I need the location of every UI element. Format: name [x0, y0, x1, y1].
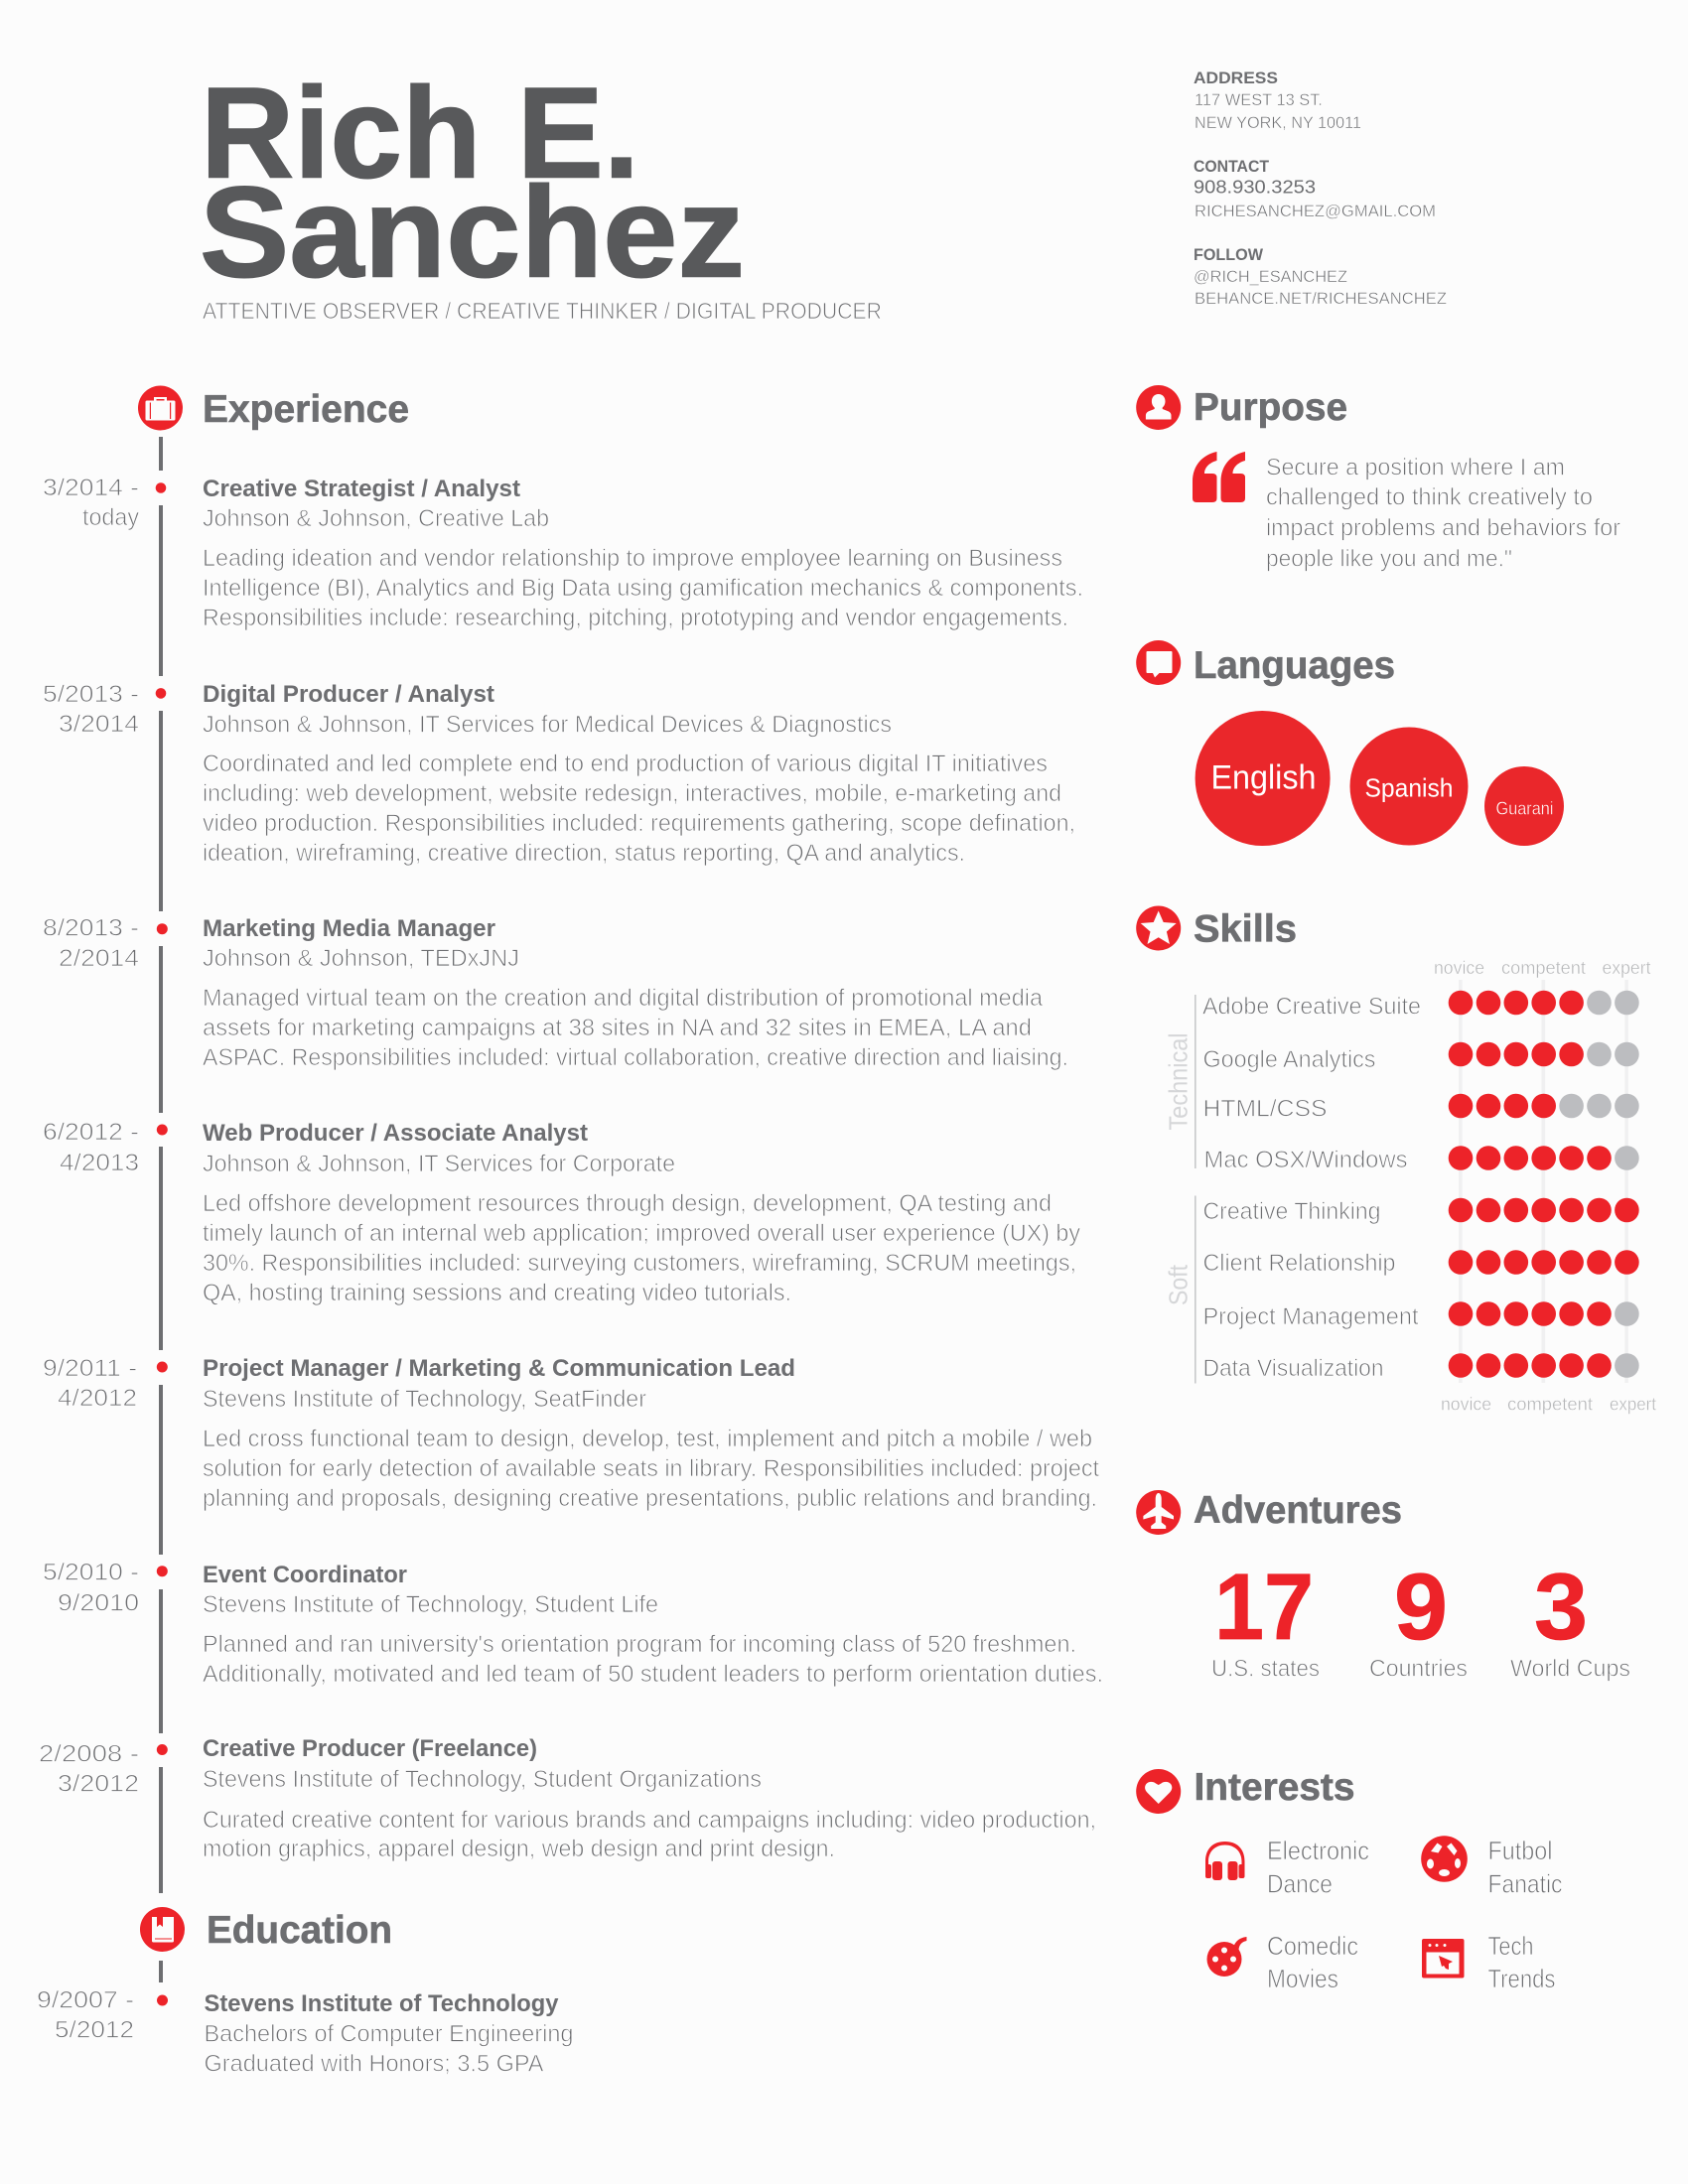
tagline: ATTENTIVE OBSERVER / CREATIVE THINKER / DIGITAL PRODUCER: [203, 298, 882, 324]
skill: Adobe Creative Suite: Adobe Creative Suite: [1202, 993, 1421, 1021]
job text: Led cross functional team to design, develop, test, implement and pitch a mobile / web: [203, 1426, 1092, 1452]
stat: 9 countries: [1369, 1555, 1468, 1682]
icon: star: [1136, 905, 1181, 951]
purpose statement: people like you and me.": [1266, 546, 1512, 572]
job text: Web Producer / Associate Analyst: [203, 1120, 588, 1147]
stat: 17 U.S. states: U.S. states: [1211, 1656, 1320, 1682]
panel: interests: [1136, 1766, 1563, 1993]
school text: Bachelors of Computer Engineering: [205, 2021, 574, 2047]
scale labels top: novice: [1434, 958, 1484, 978]
job text: Stevens Institute of Technology, Student Organizations: [203, 1766, 762, 1793]
purpose statement: [1266, 455, 1620, 572]
job text: [203, 1735, 1096, 1862]
icon: heart: [1136, 1769, 1181, 1814]
timeline dot: [157, 1744, 168, 1755]
contact block: RICHESANCHEZ@GMAIL.COM: [1195, 202, 1436, 220]
job text: QA, hosting training sessions and creating video tutorials.: [203, 1280, 791, 1306]
job text: Marketing Media Manager: [203, 915, 495, 942]
job text: Johnson & Johnson, TEDxJNJ: [203, 945, 519, 972]
timeline dot: [156, 482, 166, 493]
stat: 9 countries: Countries: [1369, 1656, 1468, 1682]
experience 1: [43, 475, 1083, 631]
contact block: FOLLOW: [1194, 245, 1264, 264]
icon: headphones: [1205, 1842, 1245, 1880]
timeline dot: [157, 1124, 168, 1136]
date: 2/2014: [59, 945, 139, 972]
timeline dot: [157, 1566, 168, 1576]
skill: Client Relationship: [1203, 1250, 1639, 1277]
experience 7: [39, 1735, 1096, 1862]
icon: film reel: [1207, 1937, 1247, 1977]
date: 2/2008 -: [39, 1741, 139, 1767]
experience 6: [43, 1559, 1103, 1688]
icon: book: [140, 1907, 185, 1952]
panel: adventures: [1136, 1489, 1630, 1682]
heading: Interests: [1136, 1766, 1354, 1814]
date: [43, 1119, 139, 1176]
job text: Creative Strategist / Analyst: [203, 476, 520, 502]
date: [43, 915, 139, 972]
heading: Education: Education: [207, 1909, 392, 1952]
scale labels top: competent: [1501, 958, 1586, 978]
contact block: 117 WEST 13 ST.: [1195, 90, 1323, 109]
experience 3: [43, 915, 1068, 1071]
interest: Tech Trends: Trends: [1487, 1964, 1555, 1993]
contact block: BEHANCE.NET/RICHESANCHEZ: [1195, 289, 1447, 308]
name title: Sanchez: [200, 159, 745, 304]
heading: Skills: Skills: [1194, 907, 1297, 951]
timeline dot: [157, 1362, 168, 1372]
job text: Johnson & Johnson, Creative Lab: [203, 505, 549, 532]
interest: Electronic Dance: [1205, 1836, 1369, 1898]
bubble: Spanish: Spanish: [1364, 772, 1454, 802]
skill: Mac OSX/Windows: Mac OSX/Windows: [1203, 1147, 1408, 1173]
stat: 3 World Cups: [1510, 1555, 1630, 1682]
job text: Led offshore development resources through design, development, QA testing and: [203, 1190, 1052, 1217]
job text: video production. Responsibilities included: requirements gathering, scope defination,: [203, 810, 1075, 837]
skill: Client Relationship: Client Relationship: [1203, 1250, 1396, 1277]
job text: Project Manager / Marketing & Communication Lead: [203, 1355, 795, 1382]
purpose statement: impact problems and behaviors for: [1266, 514, 1620, 542]
purpose statement: challenged to think creatively to: [1266, 484, 1593, 510]
date: 9/2011 -: [43, 1355, 137, 1382]
bubble: Spanish: [1350, 727, 1468, 846]
stat: 9 countries: 9: [1394, 1555, 1448, 1660]
scale labels bottom: [1441, 1394, 1656, 1414]
contact block: NEW YORK, NY 10011: [1195, 113, 1361, 132]
icon: briefcase: [138, 385, 183, 431]
job text: 30%. Responsibilities included: surveying customers, wireframing, SCRUM meetings,: [203, 1250, 1076, 1277]
timeline dot: [157, 923, 168, 934]
job text: [203, 681, 1075, 867]
experience 4: [43, 1119, 1080, 1306]
skill: Data Visualization: [1203, 1353, 1639, 1382]
interest: Comedic Movies: [1207, 1931, 1358, 1993]
job text: [203, 1562, 1103, 1688]
job text: Curated creative content for various brands and campaigns including: video production,: [203, 1807, 1096, 1834]
skill: Project Management: Project Management: [1203, 1303, 1419, 1330]
icon: browser window: [1422, 1939, 1464, 1978]
timeline dot: [157, 1995, 168, 2005]
scale labels top: expert: [1603, 958, 1650, 978]
skill: Creative Thinking: Creative Thinking: [1203, 1198, 1380, 1225]
job text: Leading ideation and vendor relationship to improve employee learning on Business: [203, 545, 1062, 572]
timeline line segments: [159, 437, 163, 1982]
job text: Event Coordinator: [203, 1562, 407, 1588]
scale labels top: [1434, 958, 1650, 978]
icon: soccer ball: [1421, 1836, 1468, 1882]
heading: Languages: Languages: [1194, 644, 1395, 687]
school text: Graduated with Honors; 3.5 GPA: [205, 2051, 544, 2077]
job text: Planned and ran university's orientation program for incoming class of 520 freshmen.: [203, 1631, 1076, 1658]
skill: Adobe Creative Suite: [1202, 991, 1639, 1021]
job text: Responsibilities include: researching, pitching, prototyping and vendor engagements.: [203, 605, 1068, 631]
date: [43, 475, 139, 531]
skill: Google Analytics: Google Analytics: [1203, 1046, 1376, 1073]
skill: Google Analytics: [1203, 1042, 1639, 1073]
job text: Intelligence (BI), Analytics and Big Data using gamification mechanics & components.: [203, 575, 1083, 602]
date: 8/2013 -: [43, 915, 139, 941]
skill: HTML/CSS: HTML/CSS: [1203, 1096, 1327, 1122]
group label: Technical: Technical: [1164, 1032, 1194, 1130]
interest: Futbol Fanatic: Futbol: [1487, 1836, 1553, 1865]
name title: [200, 60, 745, 304]
job text: solution for early detection of available seats in library. Responsibilities included: project: [203, 1455, 1099, 1482]
interest: Tech Trends: Tech: [1487, 1931, 1533, 1961]
interest: Comedic Movies: Comedic: [1267, 1931, 1358, 1961]
job text: [203, 915, 1068, 1071]
heading: Purpose: [1136, 385, 1347, 430]
interest: Electronic Dance: Electronic: [1267, 1836, 1369, 1865]
heading: Interests: Interests: [1194, 1766, 1354, 1809]
date: 3/2014: [59, 711, 139, 738]
job text: assets for marketing campaigns at 38 sites in NA and 32 sites in EMEA, LA and: [203, 1015, 1032, 1041]
education entry: [37, 1987, 574, 2077]
date: [37, 1987, 134, 2043]
contact block: @RICH_ESANCHEZ: [1194, 267, 1347, 286]
purpose statement: Secure a position where I am: [1266, 455, 1565, 480]
bubble: Guarani: [1484, 766, 1564, 846]
group label: Soft: Soft: [1164, 1264, 1194, 1305]
panel: languages: [1136, 640, 1564, 846]
icon: speech bubble: [1136, 640, 1181, 685]
date: 5/2010 -: [43, 1559, 139, 1586]
skill: Creative Thinking: [1203, 1198, 1639, 1225]
job text: planning and proposals, designing creative presentations, public relations and branding.: [203, 1485, 1097, 1512]
panel: skills: [1136, 905, 1656, 1414]
date: 9/2010: [58, 1590, 139, 1616]
date: 3/2012: [58, 1771, 139, 1797]
date: 5/2013 -: [43, 681, 139, 708]
job text: Coordinated and led complete end to end production of various digital IT initiatives: [203, 751, 1048, 777]
scale labels bottom: novice: [1441, 1394, 1491, 1414]
bubble: Guarani: Guarani: [1495, 798, 1553, 818]
job text: Creative Producer (Freelance): [203, 1735, 537, 1762]
icon: quotation mark: [1193, 452, 1245, 502]
name title: Rich E.: [201, 60, 639, 205]
date: [39, 1741, 139, 1797]
stat: 3 World Cups: 3: [1534, 1555, 1588, 1660]
heading: Adventures: Adventures: [1194, 1489, 1402, 1532]
job text: Johnson & Johnson, IT Services for Corporate: [203, 1151, 675, 1177]
contact block: ADDRESS: [1194, 68, 1278, 87]
date: today: [82, 504, 139, 531]
job text: [203, 1120, 1080, 1306]
job text: [203, 1355, 1099, 1512]
job text: ASPAC. Responsibilities included: virtual collaboration, creative direction and liaising.: [203, 1044, 1068, 1071]
job text: Digital Producer / Analyst: [203, 681, 494, 708]
job text: motion graphics, apparel design, web design and print design.: [203, 1836, 835, 1862]
date: [43, 1355, 137, 1412]
job text: Stevens Institute of Technology, SeatFinder: [203, 1386, 646, 1413]
interest: Electronic Dance: Dance: [1267, 1868, 1333, 1898]
date: [43, 681, 139, 738]
job text: Additionally, motivated and led team of 50 student leaders to perform orientation duties.: [203, 1661, 1103, 1688]
contact block: 908.930.3253: [1194, 177, 1316, 197]
contact block: CONTACT: [1194, 157, 1270, 176]
skill: Mac OSX/Windows: [1203, 1146, 1639, 1173]
job text: timely launch of an internal web application; improved overall user experience (UX) by: [203, 1220, 1080, 1247]
job text: Stevens Institute of Technology, Student Life: [203, 1591, 658, 1618]
date: 9/2007 -: [37, 1987, 134, 2013]
panel: purpose: [1136, 385, 1620, 572]
scale labels bottom: competent: [1507, 1394, 1593, 1414]
stat: 3 World Cups: World Cups: [1510, 1656, 1630, 1682]
job text: Johnson & Johnson, IT Services for Medical Devices & Diagnostics: [203, 711, 892, 739]
job text: [203, 476, 1083, 631]
bubble: English: English: [1211, 758, 1317, 796]
skill: Data Visualization: Data Visualization: [1203, 1355, 1384, 1382]
interest: Comedic Movies: Movies: [1267, 1964, 1338, 1993]
skill: Project Management: [1203, 1301, 1639, 1330]
date: 6/2012 -: [43, 1119, 139, 1146]
icon: person: [1136, 385, 1181, 430]
interest: Tech Trends: [1422, 1931, 1555, 1993]
icon: airplane: [1136, 1490, 1181, 1535]
heading: Purpose: Purpose: [1194, 386, 1347, 429]
experience 5: [43, 1355, 1099, 1512]
experience 2: [43, 681, 1075, 867]
date: 4/2012: [58, 1385, 137, 1412]
date: 3/2014 -: [43, 475, 139, 501]
date: 4/2013: [60, 1150, 139, 1176]
skill: HTML/CSS: [1203, 1094, 1639, 1122]
timeline dot: [156, 688, 166, 699]
date: 5/2012: [55, 2017, 134, 2043]
job text: Managed virtual team on the creation and digital distribution of promotional media: [203, 985, 1044, 1012]
job text: ideation, wireframing, creative direction, status reporting, QA and analytics.: [203, 840, 965, 867]
stat: 17 U.S. states: 17: [1214, 1555, 1314, 1660]
date: [43, 1559, 139, 1616]
job text: including: web development, website redesign, interactives, mobile, e-marketing and: [203, 780, 1061, 807]
contact block: [1194, 68, 1447, 308]
interest: Futbol Fanatic: [1421, 1836, 1563, 1898]
scale guide lines: [1459, 980, 1628, 1383]
school text: Stevens Institute of Technology: [205, 1990, 559, 2017]
school text: [205, 1990, 574, 2077]
interest: Futbol Fanatic: Fanatic: [1487, 1868, 1563, 1898]
heading: Skills: [1136, 905, 1297, 951]
scale labels bottom: expert: [1610, 1394, 1656, 1414]
heading: Experience: Experience: [203, 388, 409, 431]
bubble: English: [1196, 711, 1331, 846]
